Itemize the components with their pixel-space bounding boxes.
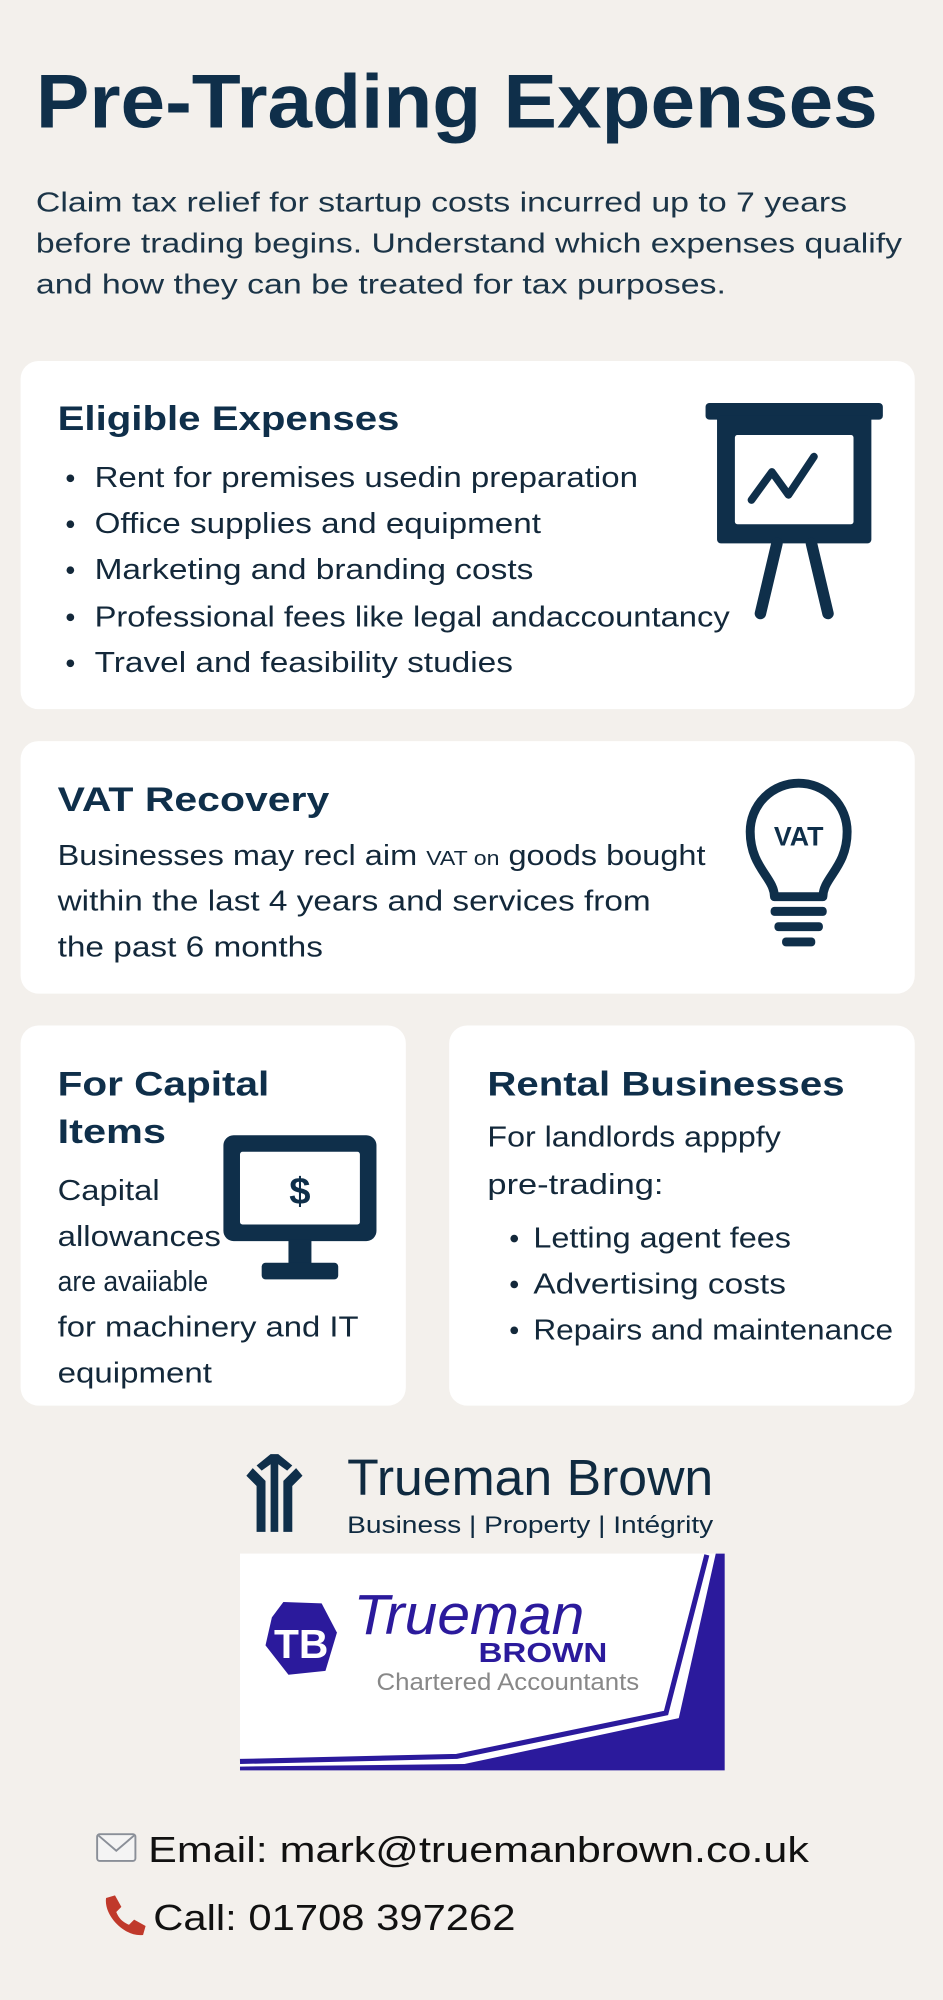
text: capital allowances: allowances [58, 1221, 221, 1253]
text: capital allowances: for machinery and IT [58, 1312, 359, 1344]
heading: for capital items: Items [58, 1113, 166, 1151]
subtitle text block: Claim tax relief for startup costs incurred up to 7 years [36, 187, 847, 218]
bullet list: eligible expenses: Office supplies and equipment [95, 508, 541, 540]
icon: VAT lightbulb: VAT [774, 822, 824, 852]
icon: presentation easel [706, 403, 883, 614]
text: rental intro and list [487, 1122, 893, 1346]
heading: VAT recovery: VAT Recovery [58, 781, 329, 819]
icon: phone [106, 1895, 146, 1935]
text: capital allowances: Capital [58, 1175, 160, 1207]
text: VAT recovery body: within the last 4 years and services from [56, 886, 651, 918]
text: capital allowances [58, 1175, 359, 1390]
logo: Trueman Brown Chartered Accountants: BROWN [479, 1637, 607, 1668]
icon: VAT lightbulb [750, 783, 847, 946]
panel: for capital items [21, 1026, 406, 1406]
logo: Trueman Brown Chartered Accountants: Chartered Accountants [376, 1669, 639, 1696]
logo: Trueman Brown Chartered Accountants [240, 1554, 725, 1770]
text: VAT recovery body [56, 840, 706, 964]
heading: rental businesses: Rental Businesses [487, 1066, 845, 1104]
bullet list: eligible expenses: Marketing and branding costs [95, 554, 533, 586]
text: VAT recovery body: Businesses may recl aim VAT on goods bought [58, 840, 706, 872]
icon: computer monitor with dollar [223, 1135, 376, 1279]
text: rental intro and list: Letting agent fees [533, 1222, 791, 1254]
logo: Trueman Brown wordmark: Trueman Brown [347, 1449, 713, 1506]
text: capital allowances: are avaiiable [58, 1266, 208, 1298]
bullet list: eligible expenses: Travel and feasibility studies [95, 647, 513, 679]
bullet list: eligible expenses: Rent for premises usedin preparation [95, 462, 638, 494]
bullet list: eligible expenses [67, 462, 731, 679]
text: rental intro and list: Advertising costs [533, 1268, 786, 1300]
logo: Trueman Brown wordmark: Business | Property | Intégrity [347, 1512, 714, 1539]
text: rental intro and list: pre-trading: [487, 1169, 663, 1201]
panel: rental businesses [449, 1026, 915, 1406]
logo: Trueman Brown Chartered Accountants: Trueman [354, 1583, 584, 1646]
text: rental intro and list: For landlords apppfy [487, 1122, 782, 1154]
bullet list: eligible expenses: Professional fees like legal andaccountancy [95, 601, 731, 633]
panel: VAT recovery [21, 741, 915, 994]
subtitle text block: and how they can be treated for tax purposes. [36, 268, 726, 299]
icon: envelope [97, 1834, 135, 1861]
text: rental intro and list: Repairs and maintenance [533, 1314, 893, 1346]
icon: TB hexagon: TB [274, 1621, 328, 1667]
text: VAT recovery body: the past 6 months [58, 932, 323, 964]
icon: computer monitor with dollar: $ [289, 1170, 311, 1213]
logo: Trueman Brown wordmark [246, 1449, 714, 1539]
title: Pre-Trading Expenses [36, 60, 878, 145]
subtitle text block: before trading begins. Understand which expenses qualify [36, 228, 902, 259]
panel: eligible expenses [21, 361, 915, 709]
heading: for capital items: For Capital [58, 1066, 269, 1104]
subtitle text block [36, 187, 902, 299]
contact: phone: Call: 01708 397262 [153, 1898, 516, 1938]
heading: eligible expenses: Eligible Expenses [58, 400, 399, 438]
heading: for capital items [58, 1066, 269, 1151]
text: capital allowances: equipment [58, 1358, 212, 1390]
icon: TB hexagon [266, 1602, 337, 1675]
icon: pillars logo mark [246, 1454, 302, 1532]
contact: email: Email: mark@truemanbrown.co.uk [148, 1830, 809, 1870]
